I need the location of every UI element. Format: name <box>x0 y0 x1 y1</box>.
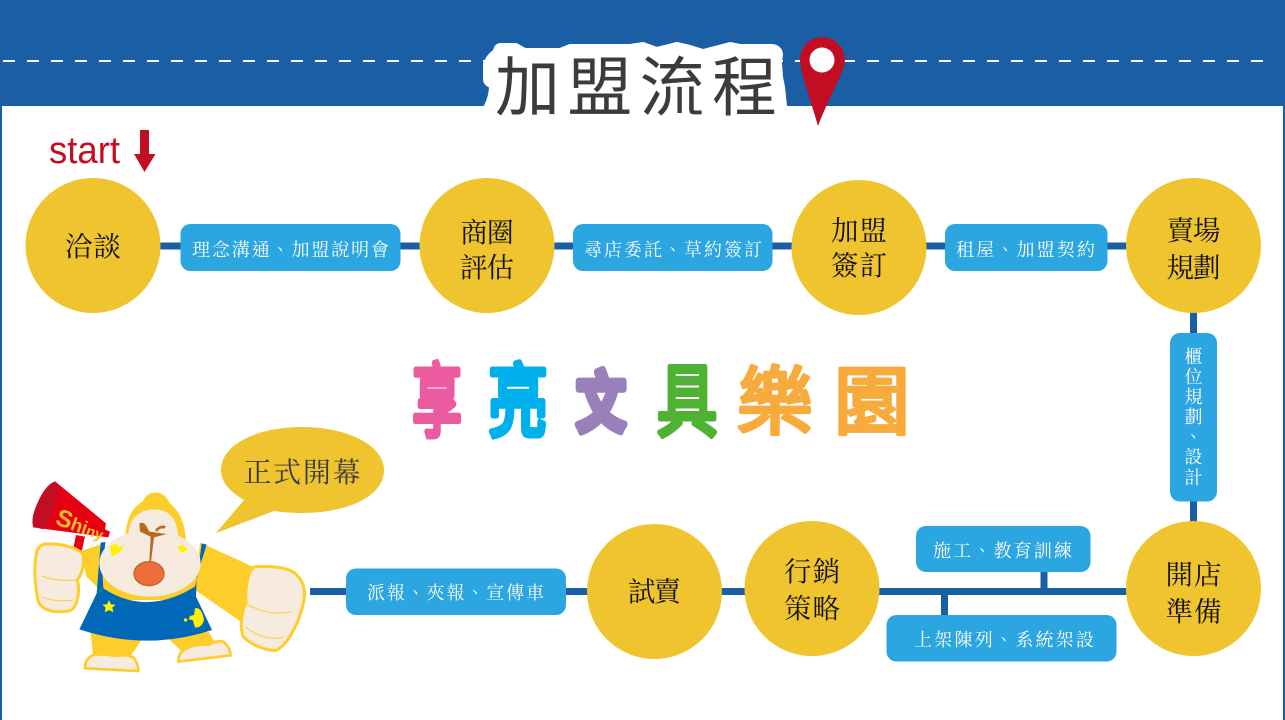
pill: 租屋、加盟契約 <box>945 224 1108 271</box>
pill: 尋店委託、草約簽訂: 尋店委託、草約簽訂 <box>584 240 762 260</box>
head dome <box>125 492 186 542</box>
step: 商圈評估: 評估 <box>460 252 514 283</box>
step: 開店準備 <box>1126 521 1261 656</box>
brand name: 園 <box>834 361 910 444</box>
step: 行銷策略 <box>744 521 880 656</box>
pill: 上架陳列、系統架設: 上架陳列、系統架設 <box>914 630 1094 650</box>
pill: 櫃位規劃、設計: 櫃 <box>1184 347 1202 367</box>
pill: 上架陳列、系統架設 <box>886 615 1116 662</box>
speech bubble <box>216 427 384 533</box>
brand name: 文 <box>576 367 626 441</box>
right foot <box>178 641 231 662</box>
step: 加盟簽訂: 加盟 <box>831 215 887 246</box>
step: 試賣 <box>587 524 722 659</box>
pill: 櫃位規劃、設計: 、 <box>1184 427 1202 447</box>
step: 洽談: 洽談 <box>65 231 121 262</box>
pill: 派報、夾報、宣傳車: 派報、夾報、宣傳車 <box>367 582 544 603</box>
megaphone <box>33 481 110 552</box>
pill: 櫃位規劃、設計: 設 <box>1184 447 1202 467</box>
decorations <box>102 600 116 612</box>
brand name <box>412 357 910 448</box>
icon: start arrow <box>134 130 156 172</box>
step: 賣場規劃: 規劃 <box>1166 252 1220 283</box>
right arm <box>195 543 257 623</box>
start label: start <box>49 130 120 172</box>
brand name: 亮 <box>488 357 548 447</box>
pill: 施工、教育訓練 <box>916 526 1090 572</box>
mascot: gorilla with megaphone <box>33 481 304 671</box>
pill: 櫃位規劃、設計 <box>1170 333 1217 502</box>
megaphone: Shiny <box>52 504 109 546</box>
pill: 租屋、加盟契約: 租屋、加盟契約 <box>956 240 1095 260</box>
pill: 理念溝通、加盟說明會: 理念溝通、加盟說明會 <box>192 240 389 260</box>
face <box>128 509 178 535</box>
pill: 櫃位規劃、設計: 劃 <box>1184 407 1202 427</box>
overalls <box>79 542 212 641</box>
left arm <box>80 543 103 590</box>
step: 行銷策略: 策略 <box>784 593 840 624</box>
step: 開店準備: 開店 <box>1166 559 1222 590</box>
pill: 派報、夾報、宣傳車 <box>346 568 566 615</box>
pill: 尋店委託、草約簽訂 <box>573 224 772 271</box>
step: 開店準備: 準備 <box>1166 596 1222 627</box>
pill: 櫃位規劃、設計: 計 <box>1184 468 1202 488</box>
step: 商圈評估: 商圈 <box>460 217 514 248</box>
step: 加盟簽訂: 簽訂 <box>831 250 887 281</box>
pill: 櫃位規劃、設計: 規 <box>1184 387 1202 407</box>
right fist <box>241 566 304 651</box>
brand name: 具 <box>657 359 717 448</box>
step: 行銷策略: 行銷 <box>784 556 840 587</box>
pill: 施工、教育訓練: 施工、教育訓練 <box>933 541 1072 561</box>
speech bubble: 正式開幕 <box>244 457 360 489</box>
brand name: 樂 <box>737 361 813 444</box>
step: 商圈評估 <box>420 178 554 313</box>
left foot <box>85 654 138 671</box>
pill: 櫃位規劃、設計: 位 <box>1184 367 1202 387</box>
icon: map pin <box>800 37 845 126</box>
connector lines <box>150 246 1194 617</box>
left fist <box>35 544 83 612</box>
legs <box>91 632 217 658</box>
brand name: 享 <box>412 359 462 448</box>
step: 試賣: 試賣 <box>628 576 682 607</box>
pill: 理念溝通、加盟說明會 <box>180 224 400 271</box>
title: 加盟流程 <box>495 51 777 124</box>
step: 洽談 <box>26 178 160 313</box>
title backdrop <box>485 44 785 109</box>
torso <box>100 567 197 600</box>
step: 賣場規劃 <box>1126 178 1261 313</box>
step: 加盟簽訂 <box>792 180 926 315</box>
step: 賣場規劃: 賣場 <box>1166 215 1220 246</box>
